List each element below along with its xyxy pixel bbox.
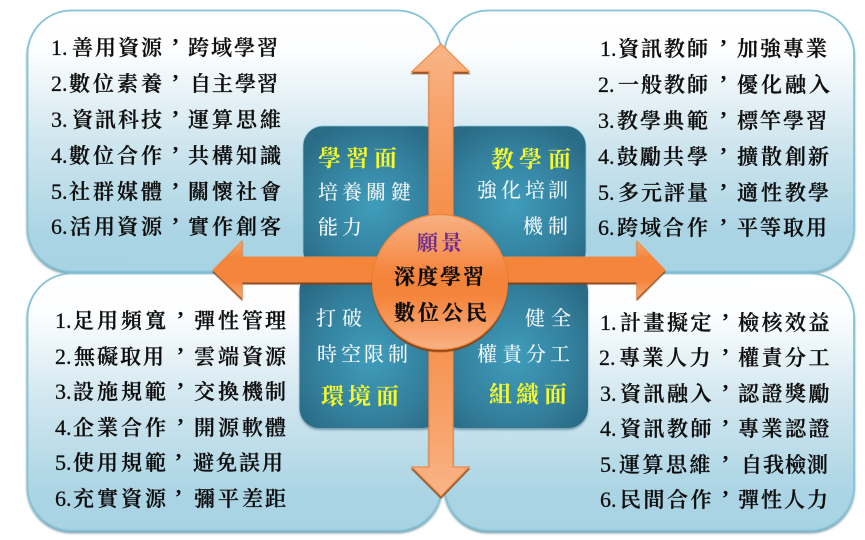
list: learning actions: , bbox=[173, 202, 178, 226]
list: teaching actions: 多元評量 bbox=[618, 181, 708, 205]
label: vision: 願景 bbox=[417, 231, 463, 255]
list: teaching actions: , bbox=[721, 132, 726, 156]
list: environment actions: 足用頻寬 bbox=[73, 309, 166, 333]
list: teaching actions: 適性教學 bbox=[737, 181, 829, 205]
list: organization actions: 4. bbox=[600, 416, 616, 441]
list: environment actions: , bbox=[178, 332, 183, 356]
list: environment actions: 2. bbox=[55, 344, 72, 369]
list: environment actions: 4. bbox=[55, 415, 72, 440]
list: teaching actions: 擴散創新 bbox=[737, 145, 829, 169]
list: learning actions: , bbox=[173, 131, 178, 155]
list: organization actions: , bbox=[723, 369, 728, 393]
list: learning actions: 5. bbox=[51, 179, 68, 204]
list: environment actions: 5. bbox=[55, 450, 72, 475]
list: learning actions: 6. bbox=[51, 214, 68, 239]
box: organization aspect bbox=[440, 270, 588, 428]
list: teaching actions: , bbox=[721, 168, 726, 192]
list: organization actions: 資訊教師 bbox=[620, 417, 712, 441]
list: organization actions: 專業認證 bbox=[738, 417, 830, 441]
list: organization actions: , bbox=[723, 440, 728, 464]
heading: organization aspect: 組織面 bbox=[489, 382, 567, 407]
list: organization actions: 6. bbox=[600, 487, 616, 512]
list: teaching actions: 資訊教師 bbox=[618, 37, 708, 61]
list: teaching actions: 6. bbox=[598, 215, 614, 240]
list: teaching actions: , bbox=[721, 24, 726, 48]
list: learning actions: 4. bbox=[51, 143, 68, 168]
list: learning actions: 共構知識 bbox=[188, 144, 282, 168]
heading: learning aspect: 學習面 bbox=[317, 146, 397, 171]
panel: environment actions bbox=[28, 274, 442, 530]
text: learning aspect description: 培養關鍵 bbox=[318, 181, 411, 204]
list: organization actions: , bbox=[723, 404, 728, 428]
text: environment aspect description: 時空限制 bbox=[317, 343, 408, 366]
list: environment actions: 企業合作 bbox=[73, 416, 166, 440]
list: organization actions bbox=[599, 298, 830, 512]
list: learning actions: , bbox=[173, 167, 178, 191]
list: organization actions: 5. bbox=[600, 452, 616, 477]
heading: environment aspect: 環境面 bbox=[321, 384, 399, 409]
list: organization actions: 檢核效益 bbox=[738, 311, 830, 335]
box: teaching aspect bbox=[440, 126, 586, 271]
list: teaching actions: , bbox=[721, 60, 726, 84]
list: teaching actions: 平等取用 bbox=[737, 216, 827, 240]
list: organization actions: 計畫擬定 bbox=[620, 311, 712, 335]
list: teaching actions: 一般教師 bbox=[618, 73, 708, 97]
list: teaching actions: 標竿學習 bbox=[737, 109, 827, 133]
list: organization actions: 權責分工 bbox=[738, 346, 830, 370]
list: organization actions: 彈性人力 bbox=[738, 488, 828, 512]
arrow: horizontal double-headed bbox=[213, 241, 665, 298]
list: environment actions: 雲端資源 bbox=[194, 345, 287, 369]
heading: teaching aspect: 教學面 bbox=[491, 147, 571, 172]
list: environment actions: 3. bbox=[55, 379, 72, 404]
list: teaching actions: 5. bbox=[598, 180, 614, 205]
list: environment actions: 彈性管理 bbox=[194, 309, 286, 333]
list: teaching actions: 跨域合作 bbox=[617, 216, 708, 240]
list: teaching actions: 3. bbox=[598, 108, 614, 133]
list: environment actions bbox=[55, 296, 287, 511]
list: learning actions: , bbox=[173, 23, 178, 47]
list: teaching actions: 加強專業 bbox=[737, 37, 827, 61]
list: learning actions: 跨域學習 bbox=[188, 36, 278, 60]
panel: teaching actions bbox=[444, 10, 854, 272]
list: organization actions: 專業人力 bbox=[619, 346, 710, 370]
list: organization actions: 認證獎勵 bbox=[738, 382, 830, 406]
list: learning actions: 2. bbox=[51, 71, 68, 96]
list: teaching actions: , bbox=[721, 203, 726, 227]
list: environment actions: 設施規範 bbox=[73, 380, 166, 404]
panel: organization actions bbox=[444, 274, 854, 530]
list: teaching actions: 教學典範 bbox=[617, 109, 708, 133]
list: environment actions: , bbox=[178, 403, 183, 427]
arrow: vertical double-headed bbox=[412, 44, 469, 496]
list: teaching actions: , bbox=[721, 96, 726, 120]
text: learning aspect description bbox=[318, 181, 411, 239]
list: learning actions: 善用資源 bbox=[72, 36, 163, 60]
list: learning actions: 1. bbox=[51, 35, 68, 60]
list: organization actions: 2. bbox=[599, 345, 616, 370]
list: organization actions: , bbox=[723, 333, 728, 357]
box: learning aspect bbox=[303, 126, 443, 271]
text: digital citizen: 數位公民 bbox=[394, 301, 487, 325]
list: environment actions: , bbox=[176, 474, 181, 498]
text: teaching aspect description bbox=[477, 179, 568, 238]
list: environment actions: 彌平差距 bbox=[194, 487, 286, 511]
list: organization actions: 1. bbox=[600, 310, 616, 335]
list: learning actions: 資訊科技 bbox=[72, 108, 162, 132]
list: environment actions: 6. bbox=[55, 486, 72, 511]
text: organization aspect description bbox=[477, 307, 571, 366]
list: learning actions bbox=[51, 23, 282, 239]
list: organization actions: 3. bbox=[600, 381, 616, 406]
text: teaching aspect description: 機制 bbox=[523, 215, 568, 238]
list: learning actions: 社群媒體 bbox=[69, 180, 162, 204]
list: environment actions: , bbox=[178, 367, 183, 391]
list: environment actions: , bbox=[176, 438, 181, 462]
list: learning actions: , bbox=[173, 59, 178, 83]
circle: vision hub bbox=[372, 214, 508, 350]
list: learning actions: 活用資源 bbox=[70, 215, 163, 239]
panel: learning actions bbox=[28, 10, 442, 272]
list: environment actions: 充實資源 bbox=[73, 487, 167, 511]
text: deep learning: 深度學習 bbox=[394, 265, 484, 289]
box: environment aspect bbox=[300, 270, 442, 428]
list: teaching actions: 鼓勵共學 bbox=[617, 145, 708, 169]
list: teaching actions: 優化融入 bbox=[737, 73, 830, 97]
list: environment actions: 開源軟體 bbox=[194, 416, 286, 440]
list: learning actions: 實作創客 bbox=[188, 215, 281, 239]
list: organization actions: , bbox=[723, 475, 728, 499]
text: environment aspect description: 打破 bbox=[316, 307, 362, 330]
list: learning actions: , bbox=[173, 95, 178, 119]
list: learning actions: 運算思維 bbox=[188, 108, 281, 132]
list: organization actions: 自我檢測 bbox=[741, 453, 828, 477]
list: environment actions: 1. bbox=[55, 308, 72, 333]
text: organization aspect description: 權責分工 bbox=[477, 343, 570, 366]
list: learning actions: 3. bbox=[51, 107, 68, 132]
list: teaching actions: 4. bbox=[598, 144, 614, 169]
text: environment aspect description bbox=[316, 307, 408, 366]
list: learning actions: 關懷社會 bbox=[188, 180, 281, 204]
list: teaching actions: 2. bbox=[598, 72, 614, 97]
list: environment actions: , bbox=[178, 296, 183, 320]
list: environment actions: 使用規範 bbox=[73, 451, 166, 475]
list: environment actions: 避免誤用 bbox=[193, 451, 283, 475]
list: organization actions: 資訊融入 bbox=[620, 382, 712, 406]
list: learning actions: 數位合作 bbox=[69, 144, 162, 168]
list: teaching actions bbox=[598, 24, 830, 240]
list: organization actions: 民間合作 bbox=[620, 488, 712, 512]
text: teaching aspect description: 強化培訓 bbox=[477, 179, 568, 202]
list: environment actions: 交換機制 bbox=[194, 380, 286, 404]
list: learning actions: 數位素養 bbox=[69, 72, 162, 96]
list: organization actions: 運算思維 bbox=[619, 453, 710, 477]
list: learning actions: 自主學習 bbox=[190, 72, 278, 96]
text: organization aspect description: 健全 bbox=[525, 307, 571, 330]
list: organization actions: , bbox=[723, 298, 728, 322]
list: teaching actions: 1. bbox=[600, 36, 616, 61]
text: learning aspect description: 能力 bbox=[318, 216, 362, 239]
list: environment actions: 無礙取用 bbox=[74, 345, 164, 369]
